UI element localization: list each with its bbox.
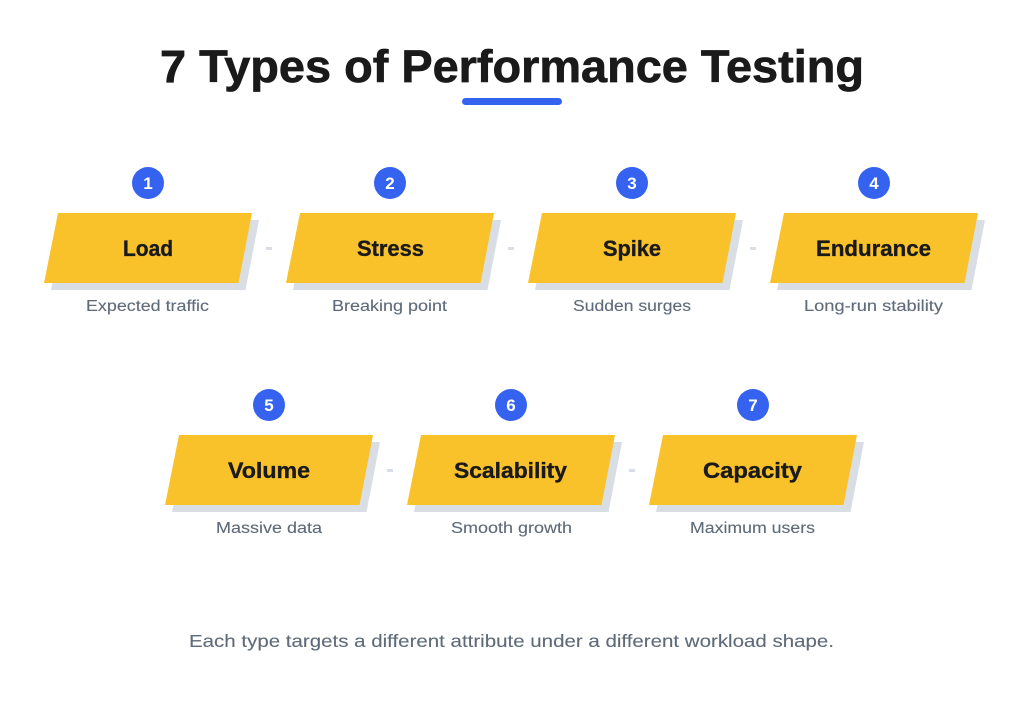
badge 5: 5	[264, 396, 274, 415]
description 4: Long-run stability	[804, 298, 943, 315]
badge 2: 2	[385, 174, 395, 193]
description 2: Breaking point	[332, 298, 448, 315]
card shadow 1	[51, 220, 259, 290]
label: Volume: Volume	[228, 458, 310, 483]
title: 7 Types of Performance Testing	[160, 41, 864, 92]
card shadow 2	[293, 220, 501, 290]
card shadow 5	[172, 442, 380, 512]
badge 1: 1	[143, 174, 153, 193]
card 1	[44, 213, 252, 283]
label: Scalability: Scalability	[454, 458, 568, 483]
card shadow 4	[777, 220, 985, 290]
step 5: Volume	[165, 389, 380, 537]
step 7: Capacity	[649, 389, 864, 537]
badge 4: 4	[869, 174, 879, 193]
badge 1	[132, 167, 164, 199]
step 2: Stress	[286, 167, 501, 315]
description 6: Smooth growth	[451, 520, 572, 537]
badge 2	[374, 167, 406, 199]
label: Load: Load	[123, 236, 173, 261]
step 6: Scalability	[407, 389, 622, 537]
badge 6	[495, 389, 527, 421]
card shadow 6	[414, 442, 622, 512]
card 6	[407, 435, 615, 505]
description 5: Massive data	[216, 520, 322, 537]
step 1: Load	[44, 167, 259, 315]
card 2	[286, 213, 494, 283]
description 7: Maximum users	[690, 520, 815, 537]
connector 3-4	[750, 247, 756, 250]
card 4	[770, 213, 978, 283]
card 3	[528, 213, 736, 283]
badge 6: 6	[506, 396, 516, 415]
badge 5	[253, 389, 285, 421]
badge 3: 3	[627, 174, 637, 193]
connector 5-6	[387, 469, 393, 472]
step 3: Spike	[528, 167, 743, 315]
label: Endurance: Endurance	[816, 236, 931, 261]
step 4: Endurance	[770, 167, 985, 315]
description 3: Sudden surges	[573, 298, 691, 315]
footer note: Each type targets a different attribute under a different workload shape.	[189, 631, 834, 651]
card shadow 3	[535, 220, 743, 290]
card 5	[165, 435, 373, 505]
label: Spike: Spike	[603, 236, 661, 261]
badge 7: 7	[748, 396, 758, 415]
connector 1-2	[266, 247, 272, 250]
description 1: Expected traffic	[86, 298, 209, 315]
label: Capacity: Capacity	[703, 458, 803, 483]
card 7	[649, 435, 857, 505]
badge 4	[858, 167, 890, 199]
label: Stress: Stress	[357, 236, 424, 261]
badge 3	[616, 167, 648, 199]
badge 7	[737, 389, 769, 421]
card shadow 7	[656, 442, 864, 512]
connector 6-7	[629, 469, 635, 472]
title underline	[462, 98, 562, 105]
connector 2-3	[508, 247, 514, 250]
